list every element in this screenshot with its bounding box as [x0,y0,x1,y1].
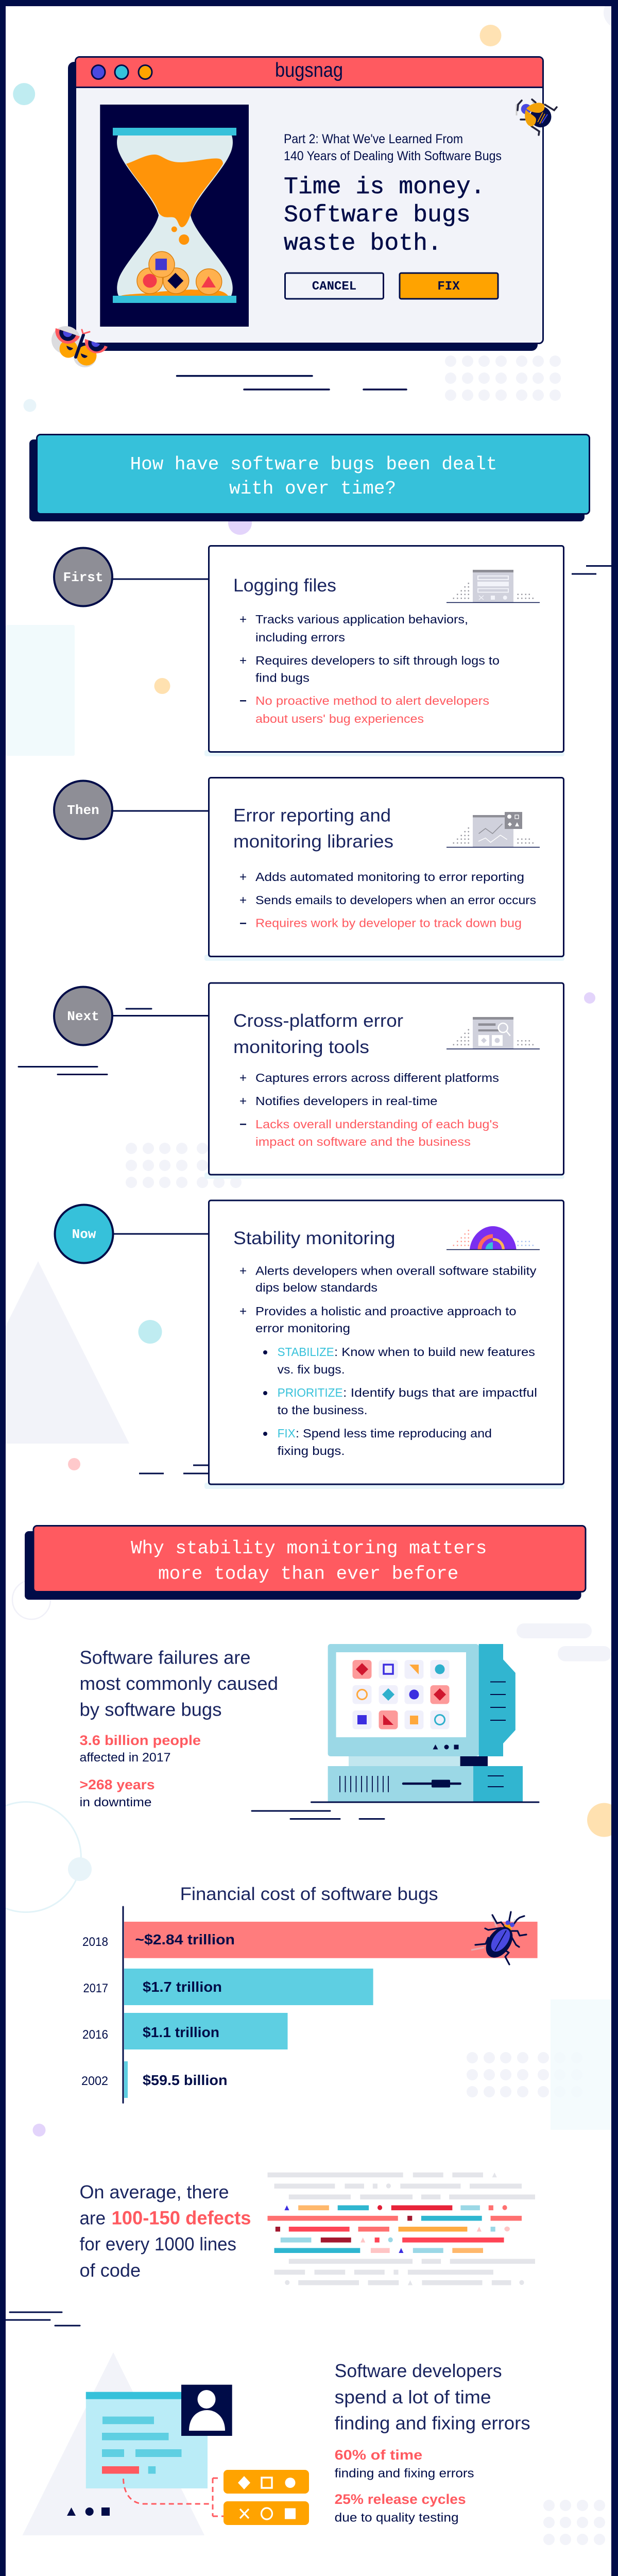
hero title: waste both. [284,230,442,257]
chart title: Financial cost of software bugs [180,1884,438,1904]
icon: butterfly [52,326,108,367]
illustration: developer fixing errors [23,2352,309,2535]
heading: how have bugs been dealt with [29,435,589,521]
card bullets [239,870,536,929]
card bullets: Alerts developers when overall software stability [255,1264,537,1278]
button: cancel: CANCEL [312,280,356,294]
bar: 2002: $59.5 billion [143,2072,228,2088]
panel: stability monitoring [204,1200,564,1489]
card bullets: No proactive method to alert developers [255,694,489,707]
heading: why stability monitoring matters: Why stability monitoring matters [131,1538,487,1559]
hero subtitle [284,132,502,163]
card heading [233,1011,403,1057]
panel: cross-platform tools [204,983,564,1179]
bar: 2002 [81,2061,228,2098]
bar: 2018 [82,1922,538,1958]
bar: 2016: 2016 [82,2028,108,2042]
illustration: desktop computer [252,1644,539,1819]
timeline marker: Next: Next [67,1009,99,1024]
card bullets: find bugs [255,671,310,684]
card bullets: Requires developers to sift through logs to [255,654,500,667]
card bullets: impact on software and the business [255,1135,471,1148]
bar: 2016: $1.1 trillion [143,2024,219,2040]
stat: 25 percent release cycles [335,2492,466,2525]
card bullets: + [239,870,247,884]
stat: 25 percent release cycles: due to quality testing [335,2511,459,2525]
stat: 3.6 billion people: 3.6 billion people [79,1733,201,1748]
sub-list: stabilize, prioritize, fix: : Know when to build new features [334,1345,535,1359]
stat: 25 percent release cycles: 25% release cycles [335,2492,466,2507]
window title bar [76,58,542,88]
text block: developers spend time: Software developers [335,2360,502,2381]
icon: blue beetle on bar [471,1912,526,1964]
bar: 2017 [83,1969,373,2005]
card bullets [239,1264,537,1335]
card bullets: + [239,1071,247,1085]
panel: hero browser window [68,57,543,351]
button: diamond square circle [224,2470,309,2494]
card heading: monitoring tools [233,1037,369,1057]
stat: 60 percent of time [335,2447,474,2480]
icon: developer avatar [181,2385,232,2436]
text block: software failures [79,1647,278,1809]
card bullets [239,613,500,725]
card bullets: + [239,1094,247,1108]
text block: 100-150 defects: are [79,2207,106,2229]
text block: 100-150 defects: for every 1000 lines [79,2233,236,2255]
hero title: Time is money. [284,173,485,200]
card bullets: error monitoring [255,1321,350,1335]
hero subtitle: Part 2: What We've Learned From [284,132,463,146]
bar: 2002: 2002 [81,2074,108,2088]
heading: how have bugs been dealt with: with over time? [229,478,396,499]
button: fix: FIX [437,280,460,294]
icon: stability gauge [447,1226,540,1250]
sub-list: stabilize, prioritize, fix: to the business. [278,1403,368,1417]
card bullets: including errors [255,631,345,644]
sub-list: stabilize, prioritize, fix: STABILIZE [278,1345,334,1359]
card bullets: + [239,654,247,668]
card bullets: Captures errors across different platforms [255,1071,499,1084]
text block: 100-150 defects: On average, there [79,2181,229,2202]
sub-list: stabilize, prioritize, fix: : Spend less time reproducing and [296,1427,492,1440]
hourglass illustration [100,105,249,327]
timeline marker: Then [54,781,208,839]
icon: magnifier window [447,1017,540,1049]
card bullets: Sends emails to developers when an error occurs [255,893,536,907]
icon: orange beetle [517,99,557,135]
bar: 2017: 2017 [83,1981,108,1995]
card bullets: Tracks various application behaviors, [255,613,468,626]
text block: developers spend time [335,2360,530,2525]
card heading: monitoring libraries [233,832,393,852]
bar: 2018: 2018 [82,1935,108,1949]
sub-list: stabilize, prioritize, fix: vs. fix bugs. [278,1363,345,1376]
card bullets: + [239,893,247,907]
card bullets: Provides a holistic and proactive approach to [255,1304,516,1318]
card bullets: Adds automated monitoring to error reporting [255,870,524,884]
stat: 3.6 billion people: affected in 2017 [79,1751,171,1765]
window title bar: bugsnag [275,59,343,81]
heading: why stability monitoring matters [25,1526,586,1600]
hero title: Software bugs [284,201,471,229]
timeline marker: Then: Then [67,803,99,818]
stat: 268 years: >268 years [79,1777,154,1792]
button: cancel [285,273,383,299]
sub-list: stabilize, prioritize, fix [263,1345,537,1458]
card heading: Error reporting and [233,806,391,825]
timeline marker: Now [55,1205,208,1263]
illustration: lines of code with defects [268,2173,535,2285]
timeline marker: Next [54,987,208,1045]
stat: 60 percent of time: finding and fixing errors [335,2467,474,2480]
card bullets: + [239,1304,247,1318]
icon: log window [447,570,540,603]
text block: software failures: by software bugs [79,1699,221,1720]
text block: software failures: Software failures are [79,1647,250,1668]
card bullets [239,1071,499,1148]
card bullets: + [239,613,247,626]
button: fix [400,273,498,299]
text block: 100-150 defects [79,2181,251,2281]
sub-list: stabilize, prioritize, fix: PRIORITIZE [278,1386,343,1399]
text block: 100-150 defects: 100-150 defects [111,2207,251,2229]
hero title [284,173,485,257]
card heading [233,806,393,852]
card bullets: about users' bug experiences [255,712,424,725]
stat: 268 years: in downtime [79,1795,151,1809]
bar: 2016 [82,2013,287,2049]
card bullets: Notifies developers in real-time [255,1094,438,1108]
button: x ring square [224,2501,309,2525]
card bullets: Requires work by developer to track down bug [255,916,522,929]
card heading: Cross-platform error [233,1011,403,1031]
bar: 2018: ~$2.84 trillion [135,1931,235,1947]
sub-list: stabilize, prioritize, fix: fixing bugs. [278,1444,345,1458]
text block: developers spend time: spend a lot of time [335,2386,491,2408]
card bullets: Lacks overall understanding of each bug's [255,1117,499,1131]
heading: why stability monitoring matters: more today than ever before [158,1563,458,1585]
heading: how have bugs been dealt with: How have software bugs been dealt [130,454,497,475]
card bullets: dips below standards [255,1281,377,1294]
timeline marker: First: First [63,570,104,585]
text block: 100-150 defects: of code [79,2260,141,2281]
text block: software failures: most commonly caused [79,1673,278,1694]
stat: 60 percent of time: 60% of time [335,2447,422,2463]
timeline marker: Now: Now [72,1227,96,1242]
card bullets: + [239,1264,247,1278]
sub-list: stabilize, prioritize, fix: FIX [278,1427,296,1440]
panel: logging files [204,546,564,756]
icon: chart window [447,812,540,847]
card heading: Stability monitoring [233,1228,396,1248]
text block: developers spend time: finding and fixing errors [335,2412,530,2433]
panel: error reporting [204,778,564,961]
stat: 268 years [79,1777,154,1809]
sub-list: stabilize, prioritize, fix: : Identify bugs that are impactful [343,1386,537,1399]
hero subtitle: 140 Years of Dealing With Software Bugs [284,149,502,163]
card heading: Logging files [233,575,336,596]
stat: 3.6 billion people [79,1733,201,1765]
bar: 2017: $1.7 trillion [143,1979,222,1995]
chart: financial cost of software bugs [81,1884,538,2104]
timeline marker: First [54,548,208,606]
